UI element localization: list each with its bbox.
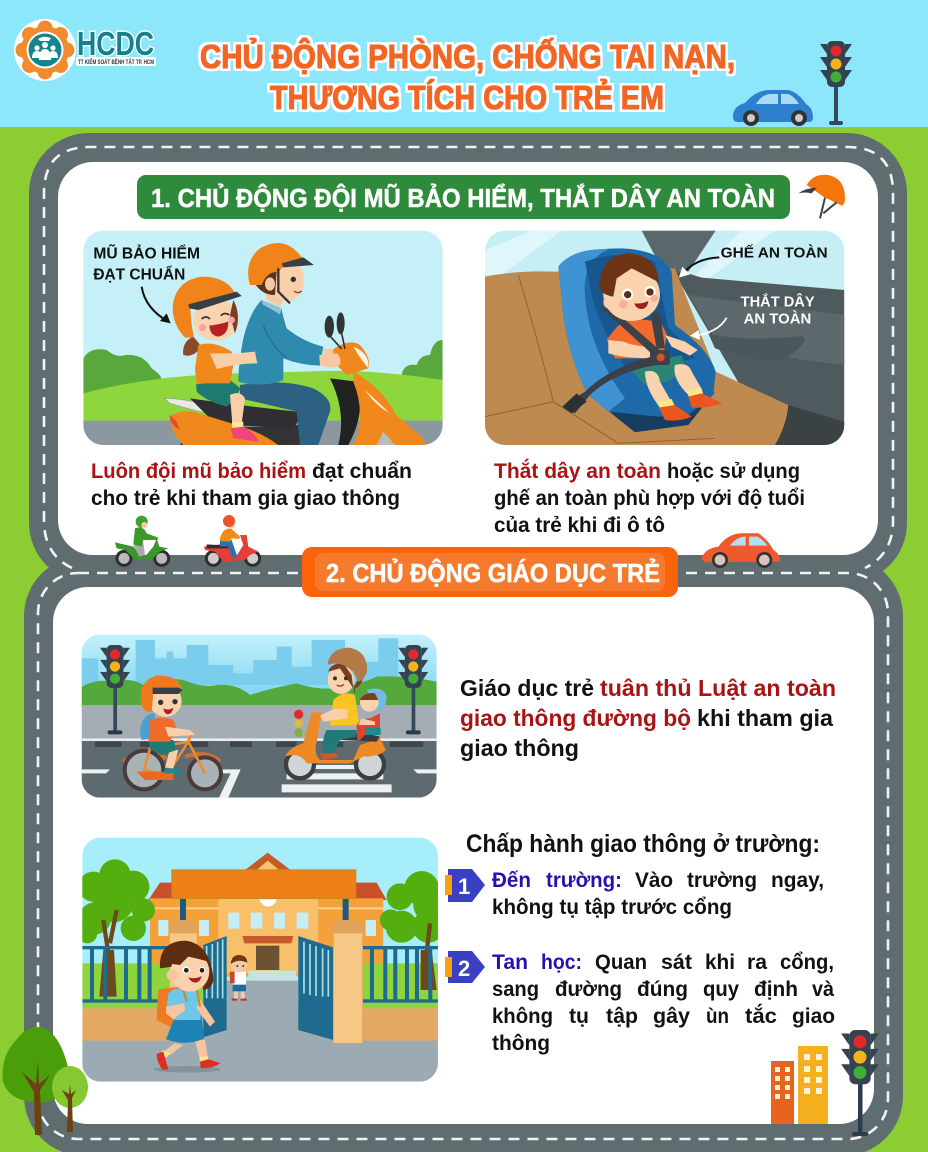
logo: HCDC: HCDC: [77, 25, 154, 62]
text: arriving at school: ngay,: [771, 869, 824, 892]
icon: red motorbike: [204, 515, 260, 565]
icon: road vehicles: [115, 515, 260, 565]
text: leaving school: ra: [747, 951, 767, 974]
text: arriving at school: trường: [687, 869, 757, 892]
label: seat belt: [690, 293, 815, 340]
label: seat belt: AN TOÀN: [744, 310, 811, 327]
text: leaving school: Quan: [595, 951, 647, 974]
child rider: [173, 277, 259, 442]
text: arriving at school: trường:: [546, 869, 622, 892]
label: car seat: GHẾ AN TOÀN: [721, 244, 828, 261]
gate pillars and leaves: [168, 920, 364, 1043]
text: helmet advice: đạt chuẩn: [312, 460, 412, 483]
text: leaving school: tập: [606, 1005, 638, 1028]
child: [562, 253, 722, 421]
text: leaving school: học:: [541, 951, 582, 974]
text: seat belt advice: của trẻ khi đi ô tô: [494, 514, 665, 537]
icon: buildings: [771, 1046, 828, 1124]
small signal toy: [294, 710, 303, 737]
label: helmet: ĐẠT CHUẨN: [93, 265, 185, 283]
road frame: section 2: [24, 556, 903, 1152]
heading: section 1: 1. CHỦ ĐỘNG ĐỘI MŨ BẢO HIỂM, THẮT DÂY AN TOÀN: [151, 182, 775, 213]
traffic lights: [100, 645, 428, 734]
logo: HCDC: TT KIỂM SOÁT BỆNH TẬT TP. HCM: [78, 58, 154, 66]
text: traffic law education: Giáo dục trẻ: [460, 675, 594, 701]
logo: HCDC: [14, 19, 156, 81]
text: leaving school: tắc: [745, 1004, 777, 1028]
trees: [77, 859, 447, 997]
title: [200, 37, 735, 116]
text: helmet advice: cho trẻ khi tham gia giao thông: [91, 487, 400, 510]
sky background: [0, 0, 928, 128]
text: arriving at school: Đến: [492, 869, 531, 892]
text: leaving school: tụ: [569, 1005, 589, 1028]
text: leaving school: đường: [555, 978, 622, 1001]
icon: blue car: [733, 90, 813, 126]
illustration: street scene, obeying traffic law: [82, 634, 437, 798]
mother and child on scooter: [285, 648, 387, 778]
heading: section 1: [137, 175, 790, 219]
text: seat belt advice: hoặc sử dụng: [667, 460, 800, 483]
label: helmet: MŨ BẢO HIỂM: [93, 244, 200, 262]
text: helmet advice: Luôn đội mũ bảo hiểm: [91, 460, 306, 483]
icon: green motorbike: [115, 516, 169, 565]
label: helmet: [93, 244, 200, 323]
label: seat belt: THẮT DÂY: [741, 293, 815, 311]
icon: orange car: [702, 533, 780, 567]
text: leaving school: sát: [661, 951, 692, 974]
text: traffic law education: khi tham gia: [697, 705, 833, 731]
text: arriving at school: Vào: [635, 869, 673, 892]
text: leaving school: cổng,: [780, 951, 834, 974]
illustration: children at school gate: [77, 838, 447, 1082]
heading: school traffic rules: Chấp hành giao thông ở trường:: [466, 830, 820, 858]
label: car seat: [679, 244, 828, 278]
heading: section 2: 2. CHỦ ĐỘNG GIÁO DỤC TRẺ: [326, 557, 660, 588]
sign and posts: [172, 870, 356, 923]
text: seat belt advice: [494, 459, 805, 537]
text: leaving school: khi: [705, 951, 735, 974]
text: arriving at school: [492, 869, 824, 919]
icon: traffic light top: [820, 41, 852, 125]
text: leaving school: đúng: [637, 978, 688, 1001]
heading: section 2: [302, 547, 678, 597]
icon: trees: [3, 1027, 88, 1135]
badge: number 1: [445, 869, 485, 902]
text: helmet advice: [91, 460, 412, 510]
text: leaving school: ùn: [706, 1005, 729, 1028]
scooter: [164, 312, 423, 445]
fence: [82, 946, 438, 1003]
panel: section 2 background: [53, 587, 874, 1124]
icon: traffic light bottom: [841, 1030, 879, 1136]
girl walking to school: [154, 941, 221, 1073]
text: leaving school: định: [754, 978, 798, 1001]
text: leaving school: Tan: [492, 951, 528, 974]
title: THƯƠNG TÍCH CHO TRẺ EM: [270, 79, 664, 116]
lawn and pavement: [82, 963, 438, 1008]
text: leaving school: gây: [653, 1005, 690, 1028]
text: leaving school: và: [812, 978, 834, 1001]
illustration: child in car seat: [485, 231, 844, 445]
text: leaving school: quy: [703, 978, 739, 1001]
text: traffic law education: tuân thủ Luật an toàn: [600, 675, 836, 701]
icon: helmet: [798, 175, 845, 218]
small boy: [230, 955, 247, 1001]
text: seat belt advice: ghế an toàn phù hợp với độ tuổi: [494, 487, 805, 510]
text: leaving school: [492, 951, 835, 1055]
road frame: section 1: [29, 133, 907, 583]
car seat: [558, 248, 716, 432]
text: seat belt advice: Thắt dây an toàn: [494, 459, 661, 483]
badge: number 2: 2: [458, 956, 470, 981]
text: leaving school: thông: [492, 1032, 550, 1055]
text: leaving school: không: [492, 1005, 553, 1028]
badge: number 1: 1: [458, 874, 470, 899]
text: traffic law education: [460, 675, 836, 761]
text: leaving school: sang: [492, 978, 539, 1001]
adult rider: [238, 243, 340, 445]
text: leaving school: giao: [792, 1005, 835, 1028]
text: traffic law education: giao thông đường bộ: [460, 705, 691, 731]
text: arriving at school: không tụ tập trước cổng: [492, 896, 732, 919]
illustration: child wearing helmet on scooter: [83, 231, 443, 445]
text: traffic law education: giao thông: [460, 735, 579, 761]
boy on bicycle: [123, 676, 221, 789]
panel: section 1 background: [58, 162, 878, 555]
title: CHỦ ĐỘNG PHÒNG, CHỐNG TAI NẠN,: [200, 37, 735, 75]
badge: number 2: [445, 951, 485, 983]
